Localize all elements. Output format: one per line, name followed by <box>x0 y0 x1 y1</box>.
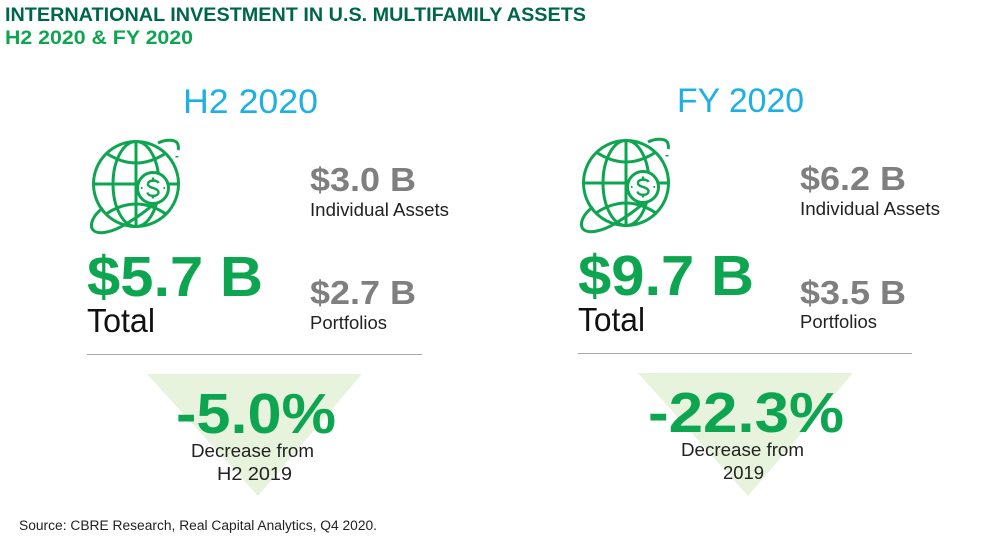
stat: portfolios: Portfolios <box>310 313 387 333</box>
stat: portfolios: $2.7 B <box>310 274 416 311</box>
stat: total <box>578 244 754 338</box>
stat: individual assets: Individual Assets <box>310 200 449 220</box>
stat: total: Total <box>578 301 645 338</box>
stat: total: Total <box>87 302 155 339</box>
stat: individual assets: Individual Assets <box>800 199 940 219</box>
callout: decrease from H2 2019 <box>147 374 362 496</box>
callout: decrease from 2019: -22.3% <box>648 381 844 445</box>
stat: portfolios: Portfolios <box>800 312 877 332</box>
stat: total: $9.7 B <box>578 244 754 308</box>
stat: total: $5.7 B <box>87 245 263 309</box>
stat: individual assets <box>310 161 449 220</box>
icon: globe with dollar <box>91 140 178 233</box>
stat: total <box>87 245 263 339</box>
callout: decrease from 2019 <box>638 373 853 496</box>
stat: portfolios <box>310 274 416 333</box>
panel heading: H2 2020: H2 2020 <box>183 83 318 121</box>
stat: individual assets: $6.2 B <box>800 160 906 197</box>
panel: H2 2020 <box>87 83 449 496</box>
stat: portfolios: $3.5 B <box>800 274 906 311</box>
callout: decrease from 2019: 2019 <box>723 463 764 483</box>
callout: decrease from H2 2019: H2 2019 <box>217 464 292 484</box>
stat: individual assets: $3.0 B <box>310 161 416 198</box>
panel heading: FY 2020: FY 2020 <box>677 82 804 120</box>
stat: individual assets <box>800 160 940 219</box>
callout: decrease from 2019: Decrease from <box>681 440 804 460</box>
callout: decrease from H2 2019: Decrease from <box>191 441 314 461</box>
stat: portfolios <box>800 274 906 332</box>
source note: Source: CBRE Research, Real Capital Analytics, Q4 2020. <box>19 518 377 533</box>
title: INTERNATIONAL INVESTMENT IN U.S. MULTIFAMILY ASSETS <box>5 5 586 26</box>
title <box>5 5 586 49</box>
title: H2 2020 & FY 2020 <box>5 28 193 49</box>
icon: globe with dollar <box>581 139 668 232</box>
callout: decrease from H2 2019: -5.0% <box>176 382 336 446</box>
panel: FY 2020 <box>578 82 940 496</box>
